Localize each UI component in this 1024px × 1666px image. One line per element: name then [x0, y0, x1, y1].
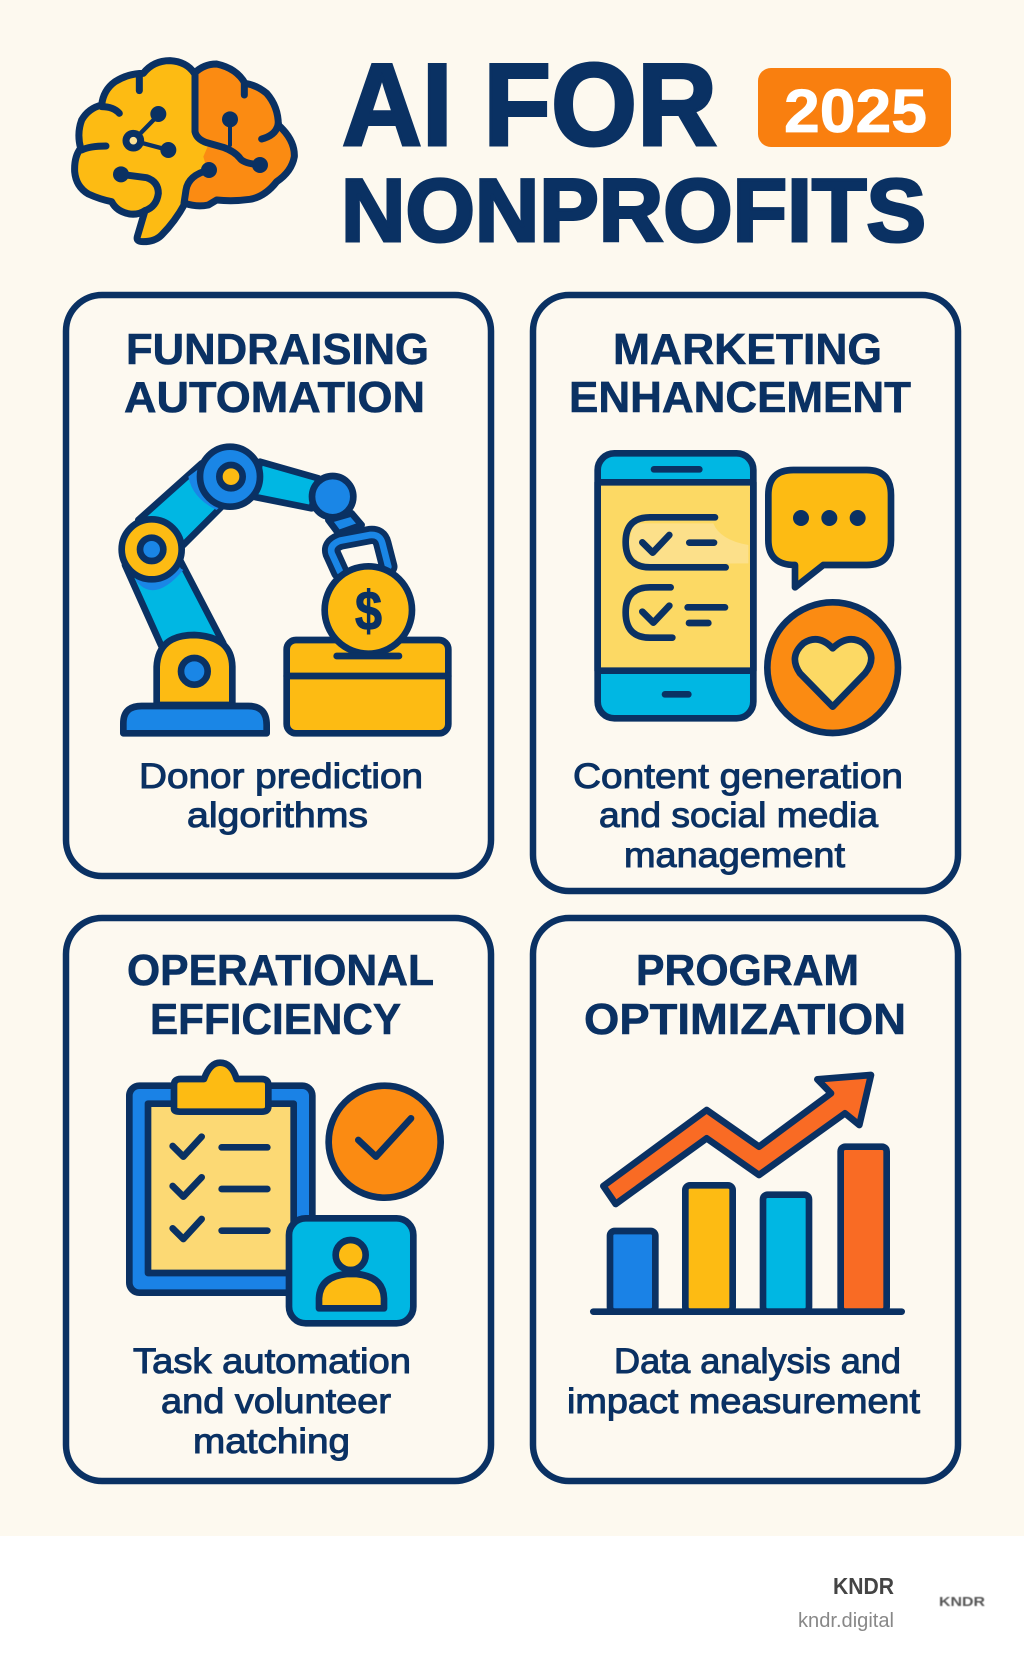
icon: dollar sign: $	[355, 579, 382, 642]
footer: KNDR branding: KNDR	[939, 1594, 986, 1609]
description: Content generation	[573, 757, 903, 796]
description: Donor prediction	[139, 757, 423, 796]
icon: brain	[75, 61, 294, 242]
icon: volunteer card	[289, 1218, 413, 1323]
heading: OPTIMIZATION	[584, 995, 906, 1044]
heading: PROGRAM	[636, 946, 859, 995]
description	[567, 1342, 920, 1421]
description: impact measurement	[567, 1382, 920, 1421]
icon: clipboard	[129, 1063, 312, 1293]
title: NONPROFITS	[341, 160, 926, 260]
heading	[584, 946, 906, 1044]
title: AI FOR	[342, 39, 717, 170]
icon: chat bubble	[768, 470, 891, 587]
bar chart	[593, 1147, 902, 1312]
heading: FUNDRAISING	[126, 325, 429, 374]
footer: KNDR branding: kndr.digital	[798, 1610, 894, 1632]
badge: 2025	[758, 68, 951, 147]
footer: KNDR branding: KNDR	[833, 1573, 894, 1599]
heading	[124, 325, 429, 422]
badge: 2025: 2025	[784, 77, 927, 145]
description: Data analysis and	[614, 1342, 901, 1381]
heading: ENHANCEMENT	[569, 373, 911, 422]
description	[139, 757, 423, 835]
description	[573, 757, 903, 875]
heading: AUTOMATION	[124, 373, 425, 422]
panel: program optimization	[533, 918, 958, 1481]
panel: operational efficiency	[66, 918, 491, 1481]
heading: MARKETING	[613, 325, 882, 374]
icon: check circle	[329, 1086, 441, 1198]
description: matching	[193, 1422, 350, 1461]
description: Task automation	[133, 1342, 411, 1381]
arrow: upward trend	[603, 1075, 871, 1204]
description: and social media	[599, 796, 879, 835]
description: management	[624, 836, 845, 875]
footer: KNDR branding	[798, 1573, 986, 1632]
heading: OPERATIONAL	[127, 946, 434, 995]
panel: marketing enhancement	[533, 295, 958, 891]
heading	[127, 946, 434, 1044]
icon: phone with checklist	[598, 453, 753, 718]
header	[75, 39, 951, 260]
heading: EFFICIENCY	[150, 995, 401, 1044]
title	[341, 39, 926, 260]
description	[133, 1342, 411, 1461]
description: algorithms	[187, 796, 368, 835]
icon: robot arm with coin and box	[122, 447, 448, 733]
icon: heart in circle	[767, 602, 898, 733]
heading	[569, 325, 911, 422]
description: and volunteer	[161, 1382, 391, 1421]
panel: fundraising automation	[66, 295, 491, 876]
